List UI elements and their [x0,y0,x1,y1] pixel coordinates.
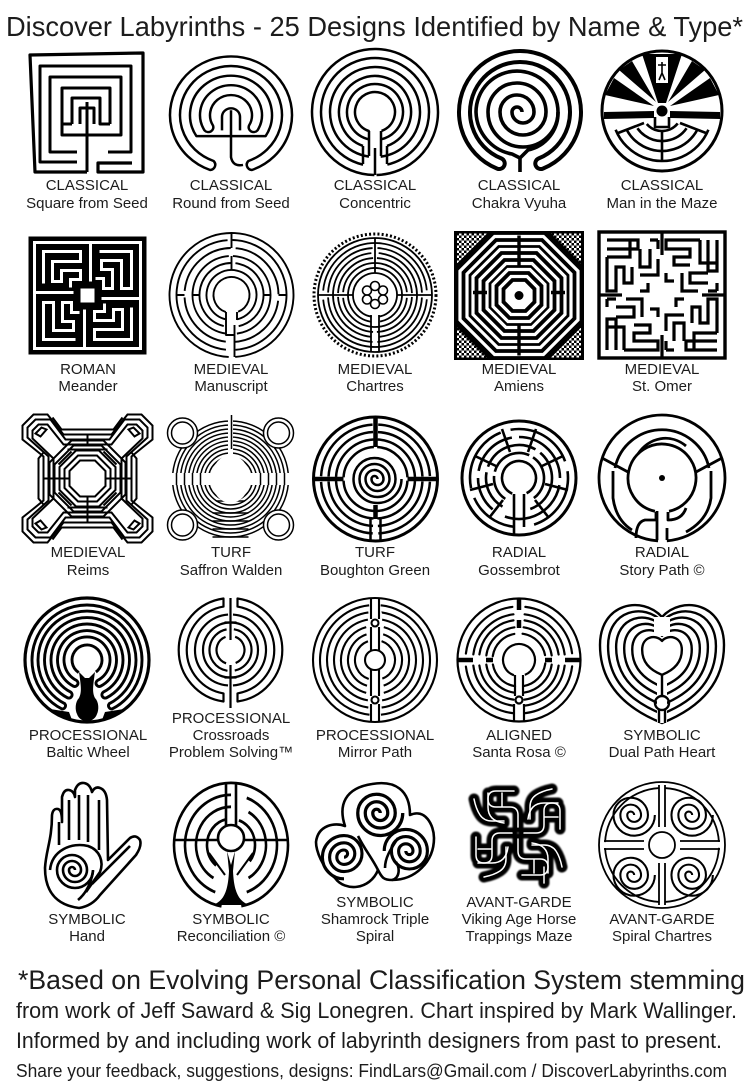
icon: crossroads labyrinth [179,598,282,708]
icon: viking knot maze [474,789,562,883]
icon: boughton green turf labyrinth [314,417,438,541]
caption: Viking Age Horse [462,911,576,928]
caption: Spiral [356,928,394,945]
caption: Baltic Wheel [46,744,130,761]
caption: Spiral Chartres [612,928,712,945]
panel: Radial Story Path [595,411,729,579]
icon: chartres labyrinth [314,234,436,356]
icon: roman meander square [28,236,146,354]
caption: SYMBOLIC [192,911,270,928]
panel: Classical Square from Seed [26,53,148,212]
caption: Square from Seed [26,195,148,212]
caption: CLASSICAL [478,177,560,194]
panel: Aligned Santa Rosa [458,598,580,761]
caption: MEDIEVAL [625,361,699,378]
icon: nested hearts [600,605,724,723]
caption: PROCESSIONAL [29,727,147,744]
caption: CLASSICAL [334,177,416,194]
caption: Amiens [494,378,544,395]
caption: PROCESSIONAL [316,727,434,744]
caption: CLASSICAL [621,177,703,194]
caption: ROMAN [60,361,116,378]
caption: Meander [58,378,118,395]
caption: TURF [211,544,251,561]
caption: ALIGNED [486,727,552,744]
icon: spiral chartres [599,782,725,908]
panel: Classical Man in the Maze [597,46,727,212]
panel: Avant-Garde Spiral Chartres [599,782,725,945]
icon: baltic wheel [25,598,149,722]
icon: saffron walden turf labyrinth [168,415,294,540]
panel: Processional Baltic Wheel [25,598,149,761]
title: Discover Labyrinths - 25 Designs Identified by Name & Type* [6,11,743,42]
caption: Man in the Maze [607,195,717,212]
icon: man in the maze [597,46,727,176]
caption: MEDIEVAL [482,361,556,378]
caption: PROCESSIONAL [172,710,290,727]
panel: Classical Concentric [310,47,440,212]
panel: Medieval Manuscript [166,230,297,395]
panel: Turf Boughton Green [314,417,438,579]
caption: Hand [69,928,105,945]
icon: shamrock triple spiral [316,783,434,887]
footnote line: informed by: Informed by and including work of labyrinth designers from past to present. [16,1028,722,1053]
icon: santa rosa labyrinth [458,598,580,722]
caption: Concentric [339,195,411,212]
caption: Reconciliation © [177,928,285,945]
panel: Turf Saffron Walden [168,415,294,579]
caption: CLASSICAL [46,177,128,194]
panel: Medieval Amiens [454,231,584,395]
icon: amiens octagon on checkered square [454,231,584,360]
icon: hand labyrinth [45,783,140,908]
icon: round seed labyrinth [170,56,292,170]
caption: SYMBOLIC [623,727,701,744]
icon: chakra spiral [459,51,581,172]
caption: MEDIEVAL [51,544,125,561]
caption: Trappings Maze [466,928,572,945]
caption: SYMBOLIC [48,911,126,928]
footnote text block [16,965,745,1081]
caption: Chakra Vyuha [472,195,567,212]
caption: Gossembrot [478,562,561,579]
footnote heading: *Based on Evolving Personal Classification System stemming [18,965,745,995]
panel: Symbolic Reconciliation [165,773,297,945]
caption: MEDIEVAL [194,361,268,378]
panel: Classical Chakra Vyuha [459,51,581,212]
panel: Medieval Chartres [314,234,436,395]
caption: Saffron Walden [180,562,282,579]
caption: St. Omer [632,378,692,395]
icon: story path labyrinth [595,411,729,545]
panel: Radial Gossembrot [461,420,577,579]
contact line: Share your feedback, suggestions, designs: FindLars@Gmail.com / DiscoverLabyrinths.com [16,1061,727,1081]
caption: Story Path © [619,562,705,579]
icon: mirror path labyrinth [313,598,437,722]
icon: manuscript labyrinth [166,230,297,360]
panel: Processional Mirror Path [313,598,437,761]
icon: concentric labyrinth [310,47,440,177]
panel: Symbolic Shamrock Triple Spiral [316,783,434,945]
caption: Boughton Green [320,562,430,579]
caption: AVANT-GARDE [609,911,715,928]
caption: Crossroads [193,727,269,744]
caption: RADIAL [635,544,689,561]
caption: AVANT-GARDE [466,894,572,911]
caption: TURF [355,544,395,561]
caption: Shamrock Triple [321,911,429,928]
panel: Medieval St. Omer [598,231,726,395]
icon: reconciliation tree labyrinth [165,773,297,917]
panel: Processional Crossroads Problem Solving [169,598,293,761]
panel: Symbolic Dual Path Heart [600,605,724,761]
panel: Classical Round from Seed [170,56,292,212]
panel: Roman Meander [28,236,146,395]
icon: st omer square maze [598,231,726,359]
caption: Reims [67,562,109,579]
footnote line: sources: from work of Jeff Saward & Sig Lonegren. Chart inspired by Mark Wallinger. [16,998,737,1023]
caption: MEDIEVAL [338,361,412,378]
caption: RADIAL [492,544,546,561]
icon: reims bastion labyrinth [22,414,152,542]
icon: gossembrot radial labyrinth [461,420,577,536]
caption: Chartres [346,378,404,395]
caption: Dual Path Heart [609,744,716,761]
caption: Round from Seed [172,195,290,212]
panel: Medieval Reims [22,414,152,579]
panel: Avant-Garde Viking Age Horse Trappings Maze [462,789,576,945]
icon: square labyrinth [30,53,143,172]
caption: SYMBOLIC [336,894,414,911]
caption: Manuscript [194,378,269,395]
caption: CLASSICAL [190,177,272,194]
caption: Mirror Path [338,744,412,761]
panel: Symbolic Hand [45,783,140,945]
caption: Problem Solving™ [169,744,293,761]
caption: Santa Rosa © [472,744,566,761]
